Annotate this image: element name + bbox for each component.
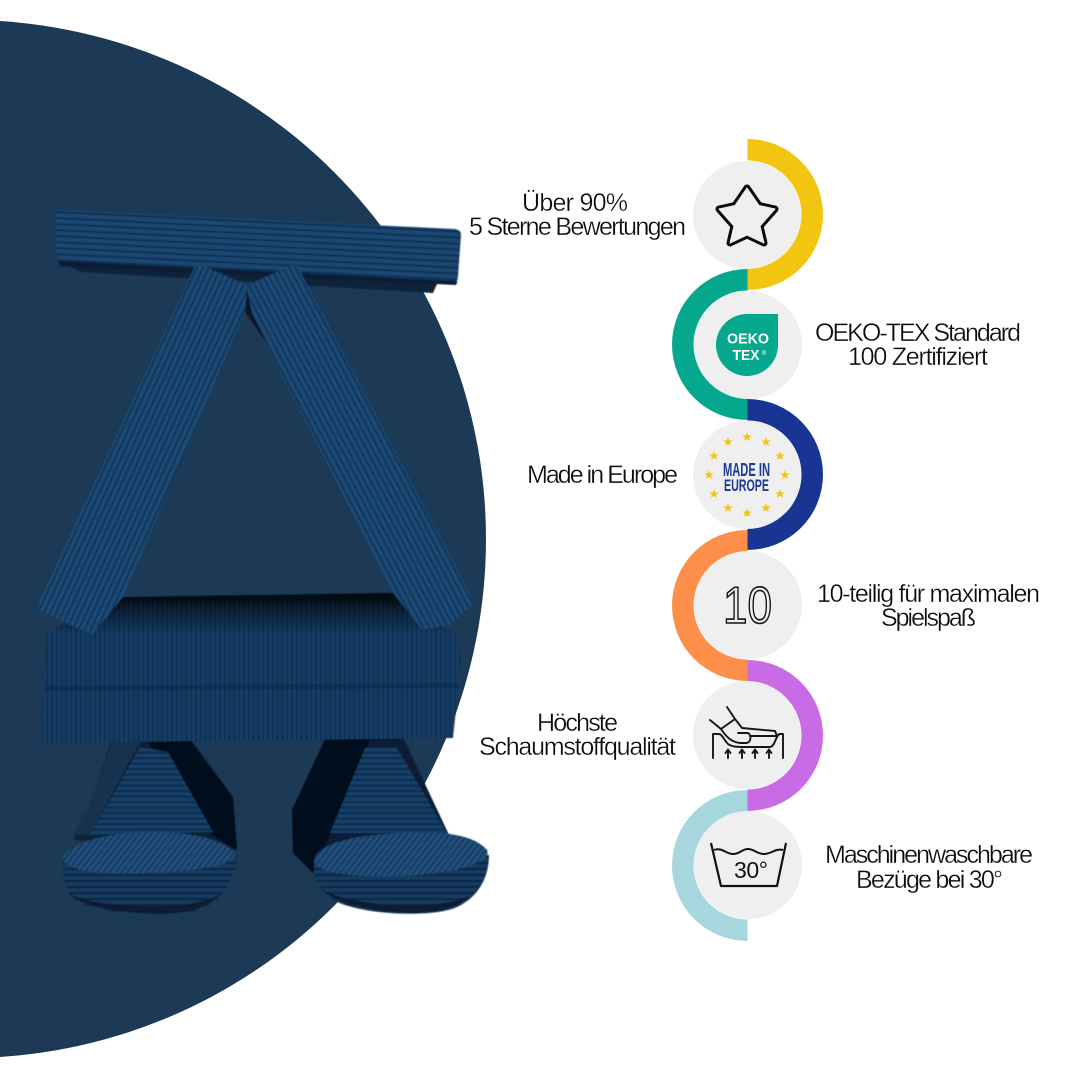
text: 10 pieces: [817, 580, 1040, 632]
text: OEKO-TEX: 100 Zertifiziert: [848, 343, 988, 371]
product top board: [55, 210, 461, 293]
icon: made in Europe badge: EUROPE: [724, 476, 769, 495]
product left leg: [38, 265, 247, 635]
ring: navy: [748, 399, 823, 550]
product seat cushion: [43, 593, 461, 743]
product right leg: [247, 265, 475, 630]
text: 10 pieces: Spielspaß: [881, 604, 976, 632]
icon: wash basin 30 degrees: [694, 811, 802, 919]
ring: orange: [672, 530, 748, 681]
icon: OEKO-TEX badge: [694, 291, 802, 399]
ring: green: [672, 269, 748, 420]
text: OEKO-TEX: OEKO-TEX Standard: [815, 319, 1021, 347]
icon: OEKO-TEX badge: OEKO: [727, 332, 769, 348]
product centre crease: [245, 290, 268, 345]
text: 5 star reviews: 5 Sterne Bewertungen: [469, 213, 686, 241]
background navy circle: [0, 20, 486, 1058]
text: 10 pieces: 10-teilig für maximalen: [817, 580, 1040, 608]
text: machine washable: [825, 841, 1033, 894]
text: 5 star reviews: Über 90%: [522, 189, 628, 217]
product: corduroy play sofa figure: [38, 210, 489, 915]
text: foam quality: Höchste: [537, 709, 618, 737]
snake ring timeline: [672, 139, 823, 941]
ring: yellow: [748, 139, 823, 290]
product left foot: [62, 735, 237, 915]
ring: purple: [748, 660, 823, 811]
icon: made in Europe badge: MADE IN: [723, 460, 770, 480]
icon: number 10: 10: [723, 577, 772, 635]
text: machine washable: Bezüge bei 30°: [856, 866, 1003, 894]
icon: star: [693, 161, 801, 269]
text: 5 star reviews: [469, 189, 686, 241]
text: made in Europe: Made in Europe: [527, 461, 678, 489]
text: foam quality: Schaumstoffqualität: [479, 733, 676, 761]
icon: made in Europe badge: [693, 421, 801, 529]
text: OEKO-TEX: [815, 319, 1021, 371]
icon: OEKO-TEX badge: TEX: [732, 347, 760, 364]
text: foam quality: [479, 709, 676, 761]
icon: wash basin 30 degrees: 30°: [734, 857, 768, 883]
icon: foam and foot: [693, 681, 801, 789]
ring: light blue: [672, 790, 748, 941]
icon: number 10: [694, 551, 802, 659]
product right foot: [292, 735, 489, 914]
text: machine washable: Maschinenwaschbare: [825, 841, 1033, 869]
icon: OEKO-TEX badge: ®: [762, 350, 767, 357]
